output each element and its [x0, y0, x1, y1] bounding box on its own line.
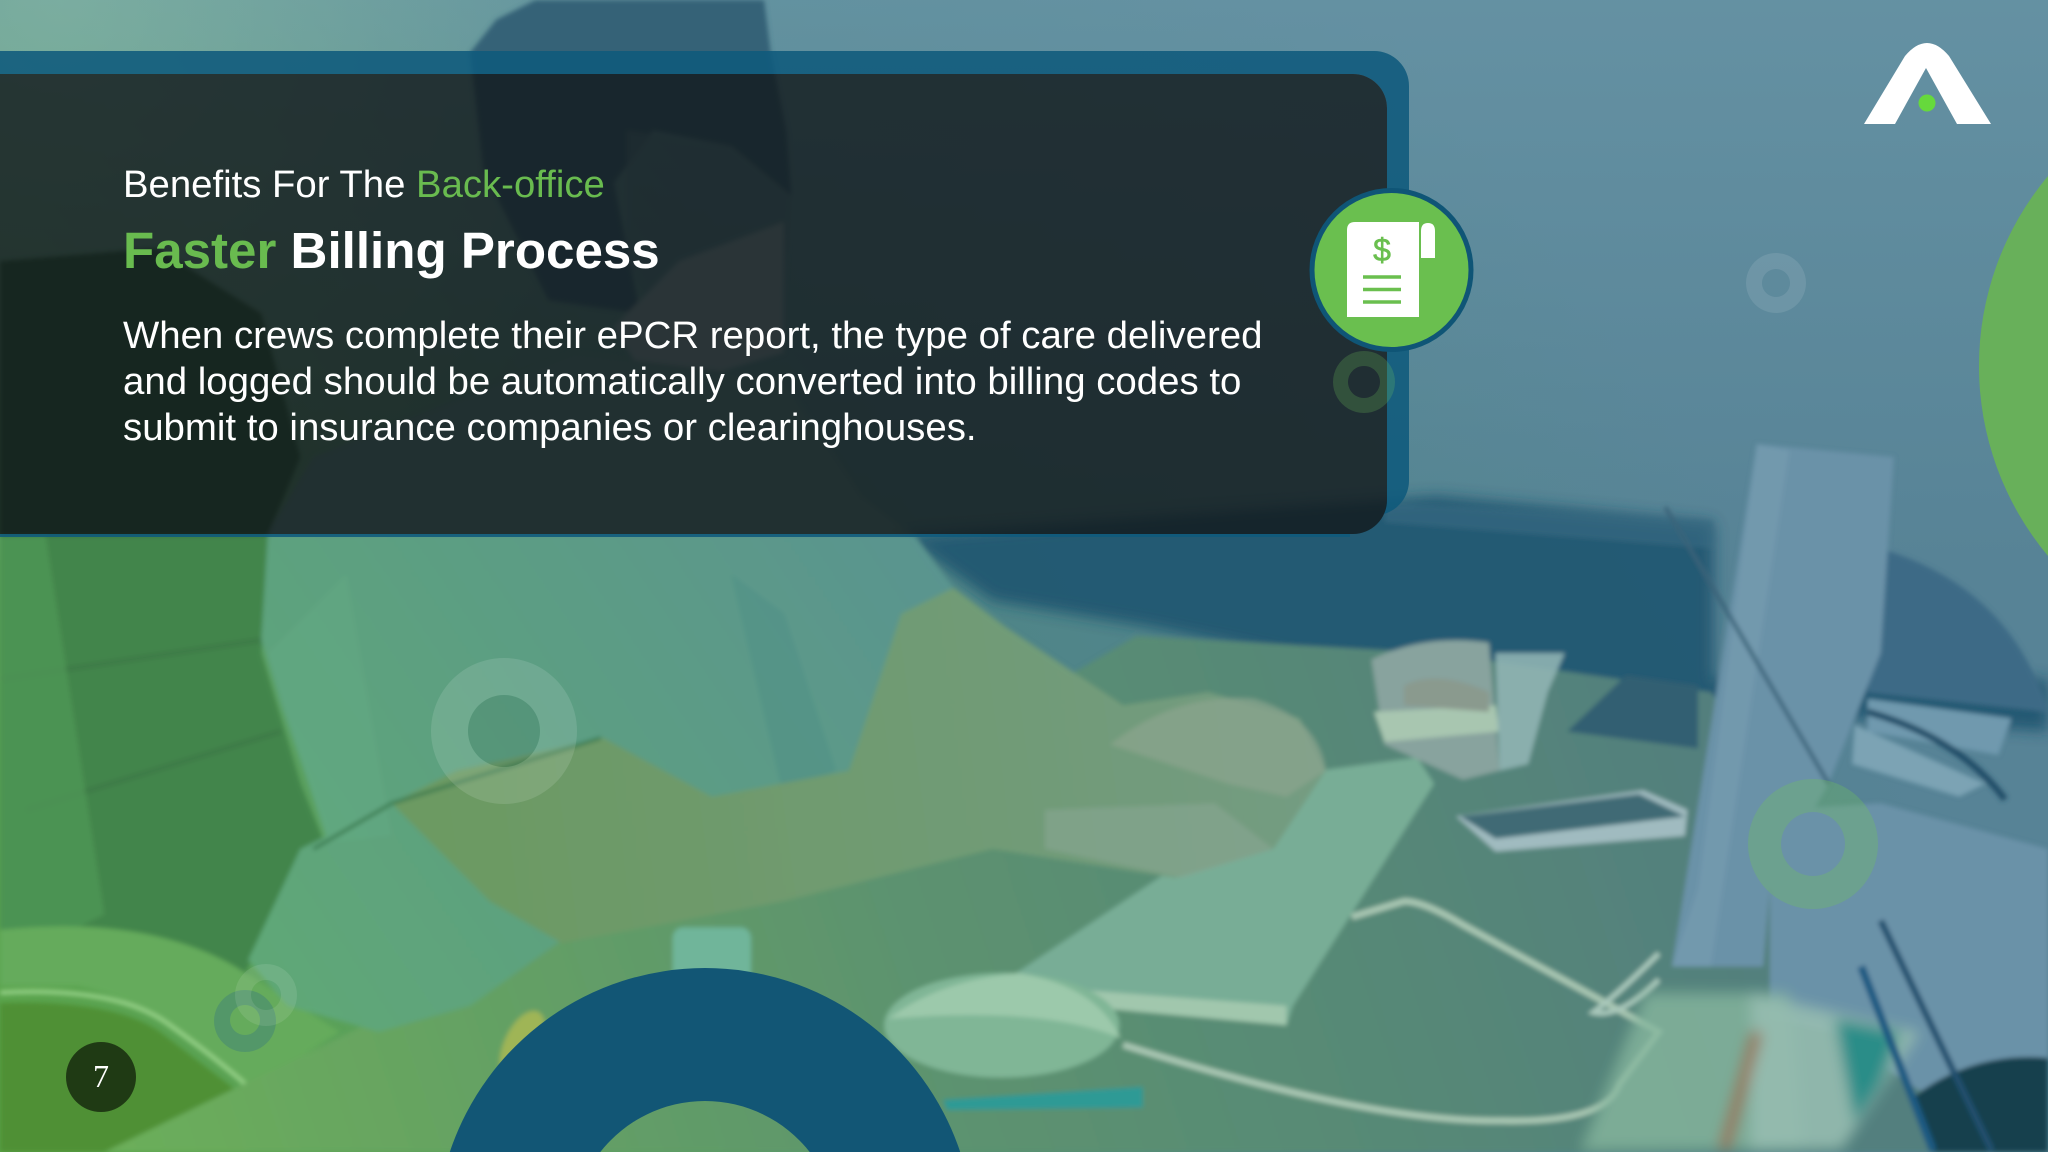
power strip and cables right [1868, 699, 2011, 755]
body text [123, 314, 1262, 449]
dark desk mat [1567, 675, 1698, 748]
pen holder [1580, 993, 1920, 1151]
sofa / wall behind desk [901, 496, 2048, 731]
ring: white lower-left [235, 964, 297, 1026]
face skin [627, 131, 791, 353]
ring: green right [1748, 779, 1878, 909]
cables [1123, 901, 1659, 1121]
page number badge: 7 [93, 1058, 109, 1094]
subheading: Benefits For The Back-office [123, 163, 605, 206]
panel: dark text card [0, 74, 1387, 534]
ring: large translucent white [431, 658, 577, 804]
items behind donut [673, 927, 751, 993]
keyboard [1016, 758, 1434, 1025]
ring: top-right pale [1746, 253, 1806, 313]
forearm and hands [392, 588, 1326, 943]
torso and shirt [248, 536, 953, 1032]
pen on desk [943, 1087, 1143, 1110]
title: Faster Billing Process [123, 222, 660, 279]
dark corner [1913, 1057, 2048, 1152]
surgical mask [614, 222, 784, 392]
chair [0, 536, 327, 1006]
phone [1456, 790, 1687, 852]
page number badge [66, 1042, 136, 1112]
body text: submit to insurance companies or clearinghouses. [123, 406, 977, 449]
chair under card [0, 248, 300, 536]
body text: When crews complete their ePCR report, the type of care delivered [123, 314, 1262, 357]
monitor stand [1672, 444, 1894, 967]
desk [104, 636, 2048, 1152]
shoulders under card [268, 353, 914, 536]
icon: billing receipt in green circle: $ [1373, 232, 1391, 268]
monitor base / white surface [1770, 803, 2048, 1091]
dental model [1371, 640, 1499, 780]
ring: blue lower-left [214, 990, 276, 1052]
head hair [470, 0, 791, 313]
body text: and logged should be automatically converted into billing codes to [123, 360, 1241, 403]
mouse [884, 973, 1119, 1078]
